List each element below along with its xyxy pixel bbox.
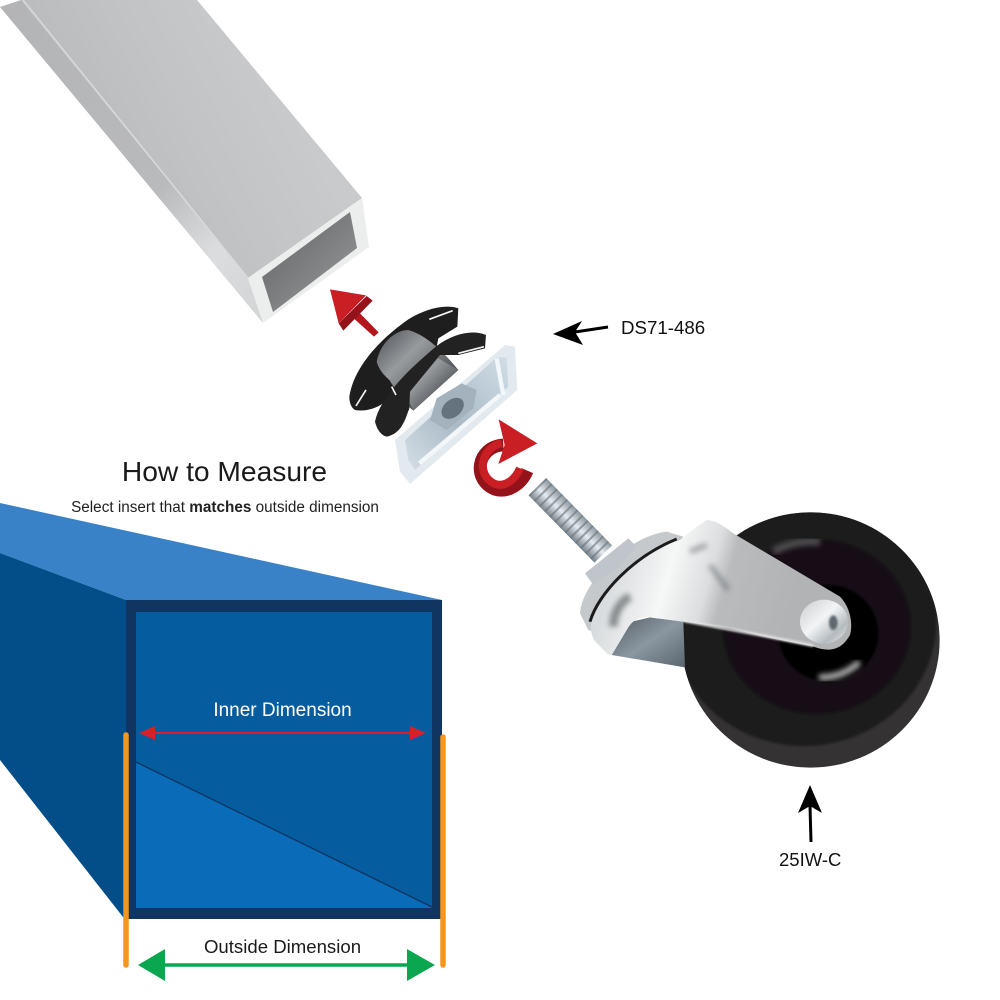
lower bracket [612, 617, 685, 667]
bracket arm [591, 520, 851, 655]
bracket lower edge [683, 621, 813, 646]
outside dimension label: Outside Dimension [204, 936, 361, 957]
nut hole [437, 394, 468, 423]
heading: How to Measure [122, 455, 327, 487]
subheading: Select insert that matches outside dimension [71, 499, 379, 516]
front barrel [405, 357, 458, 411]
hub highlight [822, 664, 857, 677]
tube top face [0, 503, 442, 600]
tube seam [23, 0, 248, 278]
orange measure lines [126, 735, 443, 965]
hex nut [585, 538, 637, 585]
wheel hub [778, 585, 878, 682]
swivel race [580, 532, 683, 637]
inner dimension arrow [139, 726, 426, 740]
rivet [800, 600, 848, 644]
caster 25IW-C [537, 487, 940, 768]
barrel [377, 330, 458, 411]
wheel body [683, 512, 938, 747]
flange slits [356, 311, 484, 406]
tube left face [0, 553, 126, 918]
tube end face [248, 198, 369, 323]
back flange [349, 307, 458, 410]
blue square tube diagram [0, 503, 442, 919]
threaded stud [537, 487, 603, 554]
tube top face [21, 0, 362, 278]
label: 25IW-C: 25IW-C [779, 849, 841, 870]
insert DS71-486 [349, 307, 517, 484]
label arrow: 25IW-C [798, 785, 822, 842]
wheel tire [682, 512, 940, 768]
tube wall frame [126, 600, 442, 919]
front flange [375, 332, 486, 437]
wheel hub ring [723, 539, 911, 714]
tube side face [0, 0, 263, 323]
tube interior [136, 612, 432, 908]
bracket crease shadows [613, 545, 728, 627]
mounting plate [395, 345, 517, 484]
outside dimension arrow [138, 949, 435, 981]
inner dimension label: Inner Dimension [213, 700, 352, 721]
tube opening [262, 212, 357, 312]
label arrow: DS71-486 [553, 321, 608, 345]
rivet shade [829, 615, 838, 630]
hub upper sheen [773, 542, 820, 552]
interior diagonal [136, 762, 432, 907]
threaded nut [430, 383, 477, 430]
red rotate arrow [480, 419, 537, 490]
label: DS71-486: DS71-486 [621, 317, 705, 338]
race gap [590, 539, 677, 622]
red push arrow [330, 289, 379, 337]
wheel tread [683, 512, 938, 747]
plate recess [405, 357, 508, 470]
aluminum tube [0, 0, 369, 323]
interior lower face [136, 762, 432, 908]
plate slots [419, 358, 503, 463]
